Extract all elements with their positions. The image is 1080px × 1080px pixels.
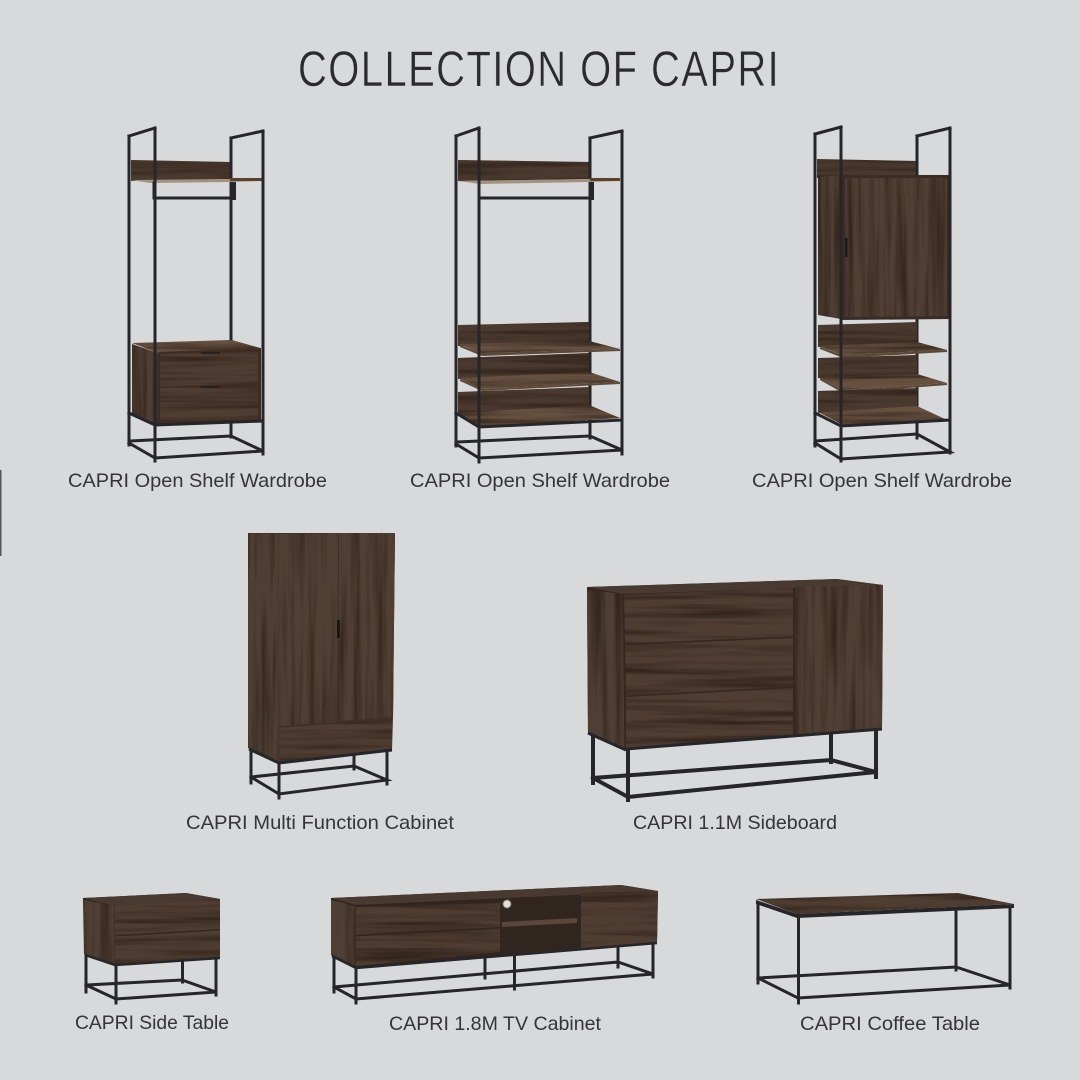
base frame bbox=[334, 943, 653, 1003]
product: open shelf wardrobe with drawers bbox=[129, 128, 263, 461]
product: TV cabinet bbox=[331, 885, 658, 1003]
product: open shelf wardrobe with shelves bbox=[456, 128, 622, 462]
upper shelf bbox=[458, 178, 620, 184]
hanging rail bbox=[154, 182, 236, 200]
hanging rail bbox=[479, 182, 594, 200]
label: coffee table: CAPRI Coffee Table bbox=[800, 1013, 980, 1035]
product: open shelf wardrobe with door bbox=[815, 127, 950, 461]
label: wardrobe with door: CAPRI Open Shelf Wardrobe bbox=[752, 470, 1012, 492]
drawer unit bbox=[132, 340, 261, 426]
product: coffee table bbox=[756, 893, 1014, 1003]
front frame bbox=[456, 128, 622, 462]
three shelves bbox=[458, 322, 620, 427]
label: wardrobe with shelves: CAPRI Open Shelf Wardrobe bbox=[410, 470, 670, 492]
TV cabinet body bbox=[331, 885, 658, 968]
back legs and top panel bbox=[815, 134, 917, 446]
upper shelf bbox=[131, 178, 262, 183]
product: sideboard bbox=[587, 579, 883, 800]
product: multi function cabinet bbox=[248, 533, 395, 798]
label: TV cabinet: CAPRI 1.8M TV Cabinet bbox=[389, 1013, 602, 1035]
base frame bbox=[86, 955, 216, 1003]
frame bbox=[758, 903, 1010, 1003]
back legs and top panel bbox=[129, 136, 231, 445]
door cabinet bbox=[818, 175, 950, 320]
title: COLLECTION OF CAPRI bbox=[298, 41, 779, 97]
label: multi function cabinet: CAPRI Multi Function Cabinet bbox=[186, 812, 455, 834]
label: sideboard: CAPRI 1.1M Sideboard bbox=[633, 812, 837, 834]
label: wardrobe with drawers: CAPRI Open Shelf Wardrobe bbox=[68, 470, 327, 492]
base frame bbox=[251, 750, 387, 798]
sideboard body bbox=[587, 579, 883, 750]
three shelves bbox=[818, 322, 947, 425]
table top bbox=[756, 893, 1014, 918]
back legs and top panel bbox=[456, 136, 590, 446]
front frame bbox=[129, 128, 263, 461]
front frame bbox=[815, 127, 950, 461]
cabinet body bbox=[248, 533, 395, 763]
side table body bbox=[83, 893, 220, 965]
label: side table: CAPRI Side Table bbox=[75, 1012, 229, 1034]
base frame bbox=[593, 730, 876, 800]
product: side table bbox=[83, 893, 220, 1003]
